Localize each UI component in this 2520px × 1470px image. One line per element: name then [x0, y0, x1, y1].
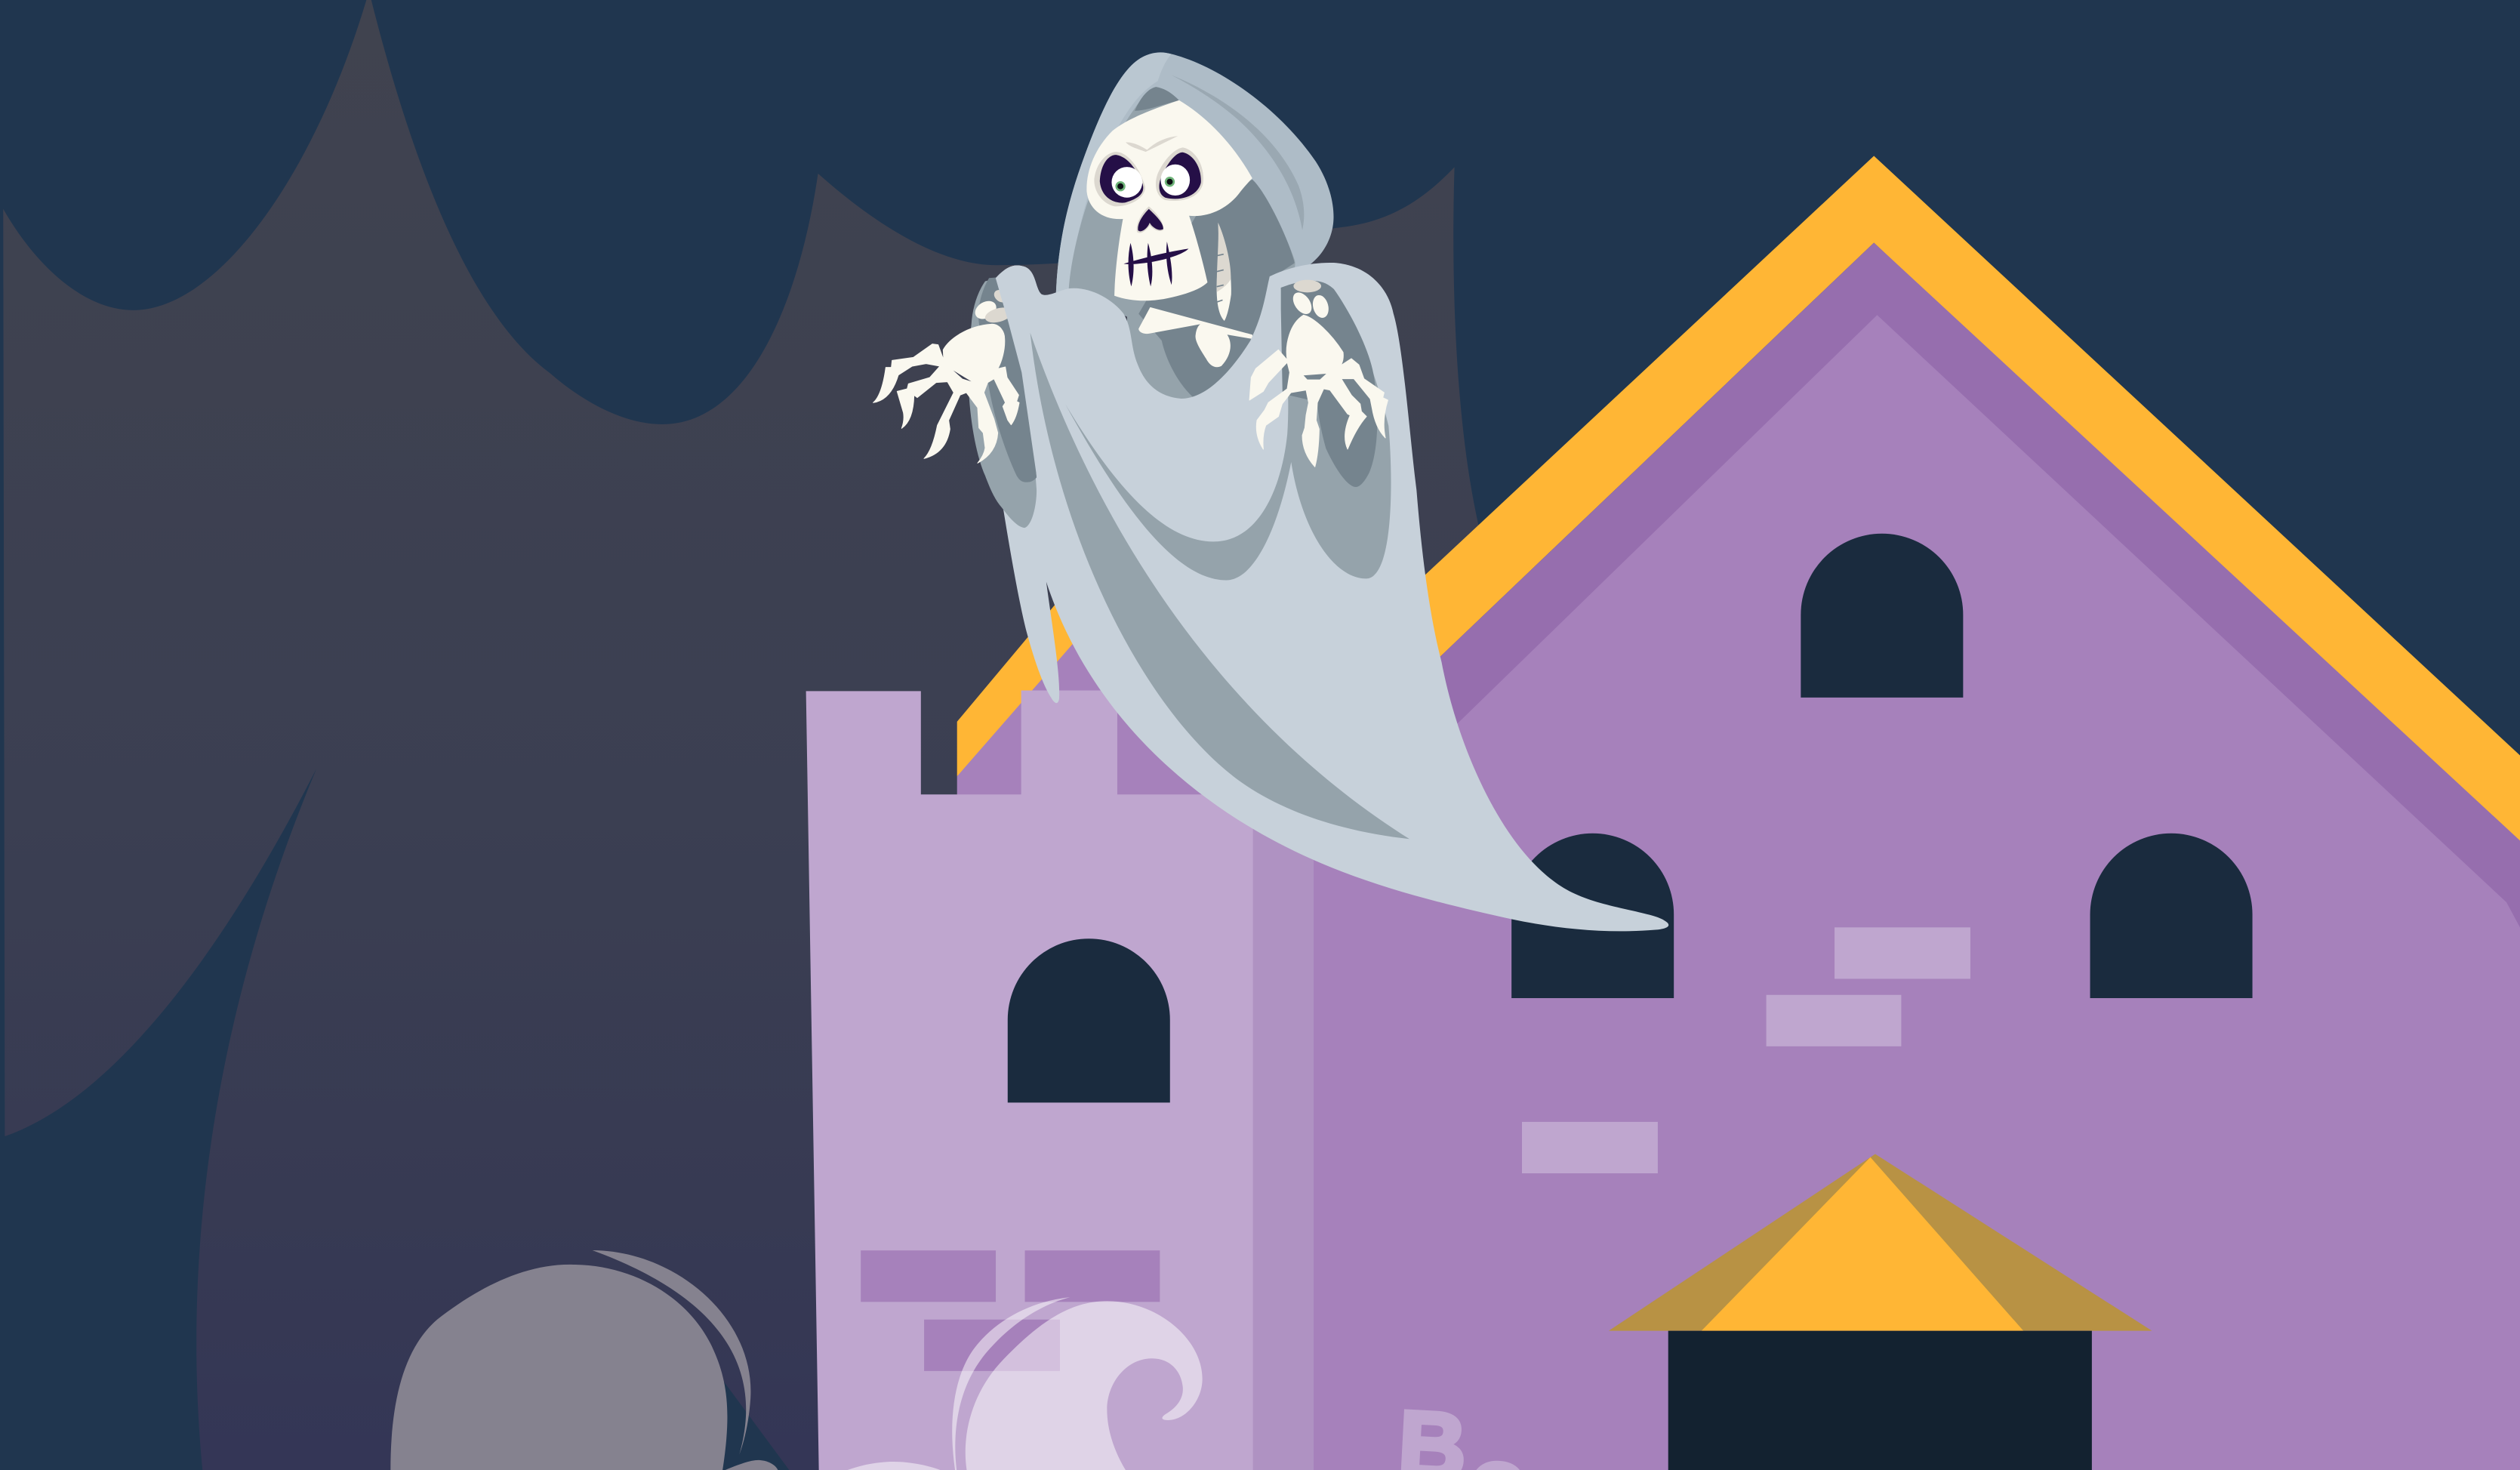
door	[1668, 1331, 2092, 1470]
right socket rim	[1156, 147, 1203, 201]
tower roof purple	[957, 643, 1270, 803]
right hand	[1249, 280, 1388, 467]
left socket rim	[1094, 152, 1145, 206]
house main wall and roof	[1253, 156, 2520, 1470]
long body fold	[1030, 333, 1409, 839]
left sleeve flap	[996, 266, 1064, 490]
spine	[1217, 223, 1231, 321]
window: right	[2090, 834, 2253, 998]
canopy roof	[1702, 1157, 2023, 1331]
hood light edge	[1055, 52, 1172, 299]
spine ticks	[1217, 254, 1224, 302]
bricks on tower	[861, 1250, 1160, 1371]
door canopy	[1609, 1154, 2152, 1331]
nose	[1138, 209, 1163, 231]
cavity shadow	[1138, 180, 1295, 396]
brow	[1126, 136, 1178, 152]
window: middle	[1511, 834, 1674, 998]
cavity	[1068, 87, 1295, 409]
main roof orange	[1318, 156, 2520, 852]
collar bone	[1138, 307, 1253, 367]
ghost	[873, 52, 1668, 931]
right iris	[1165, 177, 1175, 186]
blue wedge behind blob	[719, 1374, 789, 1470]
tower side stripe	[1253, 812, 1314, 1470]
left hand	[873, 288, 1019, 463]
main wall	[1253, 315, 2520, 1470]
left carpal bones	[992, 288, 1010, 305]
left palm gap	[953, 371, 972, 381]
mouth	[1123, 242, 1188, 286]
tower roof orange	[957, 588, 1125, 776]
left eye	[1111, 167, 1142, 198]
right pupil	[1166, 179, 1172, 185]
swirl of mist	[848, 1297, 1203, 1470]
hood and inner cavity	[1055, 52, 1333, 409]
right palm and fingers	[1249, 315, 1388, 467]
blob foot	[726, 1460, 778, 1470]
right sleeve shadow	[1281, 281, 1377, 487]
tower	[806, 588, 1314, 1470]
roof purple band	[1253, 242, 2520, 1470]
swirl foot	[848, 1462, 940, 1470]
right palm gap	[1304, 374, 1326, 380]
hanging drape silhouette	[3, 0, 1479, 1470]
skull	[1086, 100, 1252, 321]
left socket	[1100, 155, 1143, 203]
window: top	[1801, 534, 1963, 698]
hood	[1055, 53, 1333, 299]
left pupil	[1117, 183, 1123, 190]
swirl thin arc	[952, 1297, 1070, 1470]
window: tower	[1008, 938, 1170, 1102]
right sleeve and drape fold	[1065, 281, 1391, 580]
blob highlight arc	[593, 1250, 750, 1455]
right carpal bones	[1293, 280, 1321, 292]
tower wall	[806, 691, 1253, 1470]
cavity top shadow	[1135, 87, 1179, 111]
left sleeve	[968, 276, 1037, 528]
blob body	[390, 1265, 727, 1470]
skull bone	[1086, 100, 1252, 300]
right socket	[1159, 153, 1201, 199]
swirl body	[966, 1301, 1203, 1470]
left palm and fingers	[873, 324, 1019, 463]
spine shade	[1217, 223, 1231, 292]
gravestone blob	[390, 1250, 789, 1470]
nose rim	[1137, 206, 1163, 233]
left iris	[1115, 181, 1126, 191]
right eye	[1160, 165, 1190, 196]
hood fold	[1172, 75, 1304, 230]
bricks on main wall	[1522, 927, 1970, 1173]
left sleeve shadow	[978, 276, 1037, 482]
ghost body	[988, 263, 1668, 931]
canopy shadow	[1609, 1154, 2152, 1331]
